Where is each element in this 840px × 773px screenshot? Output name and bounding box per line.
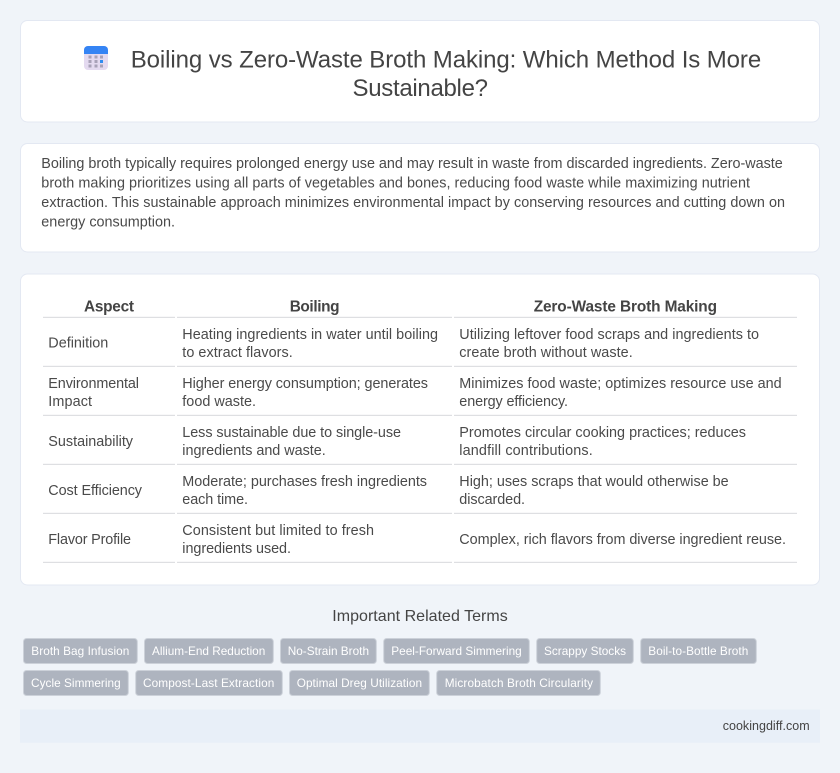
tag: No-Strain Broth: [288, 644, 369, 658]
tag: Boil-to-Bottle Broth: [648, 644, 748, 658]
tag: Optimal Dreg Utilization: [297, 676, 422, 690]
row: flavor profile: Complex, rich flavors from diverse ingredient reuse.: [459, 532, 786, 548]
tag: [24, 670, 128, 696]
footer bar: cookingdiff.com: [723, 719, 810, 733]
row: environmental impact: Impact: [48, 394, 92, 410]
row: flavor profile: [48, 523, 786, 557]
row: cost efficiency: Cost Efficiency: [48, 483, 143, 499]
panel: introduction text: energy consumption.: [41, 214, 175, 230]
panel: title header: [20, 20, 820, 122]
tag: [280, 638, 376, 664]
row: flavor profile: Flavor Profile: [48, 532, 131, 548]
row: sustainability: Less sustainable due to single-use: [182, 425, 401, 441]
row: environmental impact: energy efficiency.: [459, 394, 568, 410]
row: definition: Utilizing leftover food scraps and ingredients to: [459, 327, 759, 343]
tag: Peel-Forward Simmering: [391, 644, 522, 658]
tag: Broth Bag Infusion: [31, 644, 129, 658]
title: [131, 46, 761, 102]
tag: Scrappy Stocks: [544, 644, 626, 658]
tag: Cycle Simmering: [31, 676, 121, 690]
tag: [290, 670, 429, 696]
tag: Compost-Last Extraction: [143, 676, 274, 690]
table header row: Zero-Waste Broth Making: [534, 299, 717, 316]
table header row: [84, 299, 717, 316]
row: cost efficiency: [48, 474, 729, 508]
row: sustainability: ingredients and waste.: [182, 443, 326, 459]
table header row: Boiling: [290, 299, 340, 316]
panel: related term tags: [24, 638, 756, 696]
tag: [144, 638, 273, 664]
row: environmental impact: Minimizes food waste; optimizes resource use and: [459, 376, 782, 392]
row: environmental impact: [48, 376, 782, 410]
table header row: Aspect: [84, 299, 134, 316]
title: Boiling vs Zero-Waste Broth Making: Which Method Is More: [131, 46, 761, 74]
tag: [641, 638, 756, 664]
tag: [24, 638, 137, 664]
row: cost efficiency: discarded.: [459, 492, 525, 508]
row: sustainability: Promotes circular cooking practices; reduces: [459, 425, 746, 441]
title: Sustainable?: [352, 75, 488, 102]
row: flavor profile: ingredients used.: [182, 541, 291, 557]
row: definition: Definition: [48, 336, 108, 352]
row: cost efficiency: Moderate; purchases fresh ingredients: [182, 474, 427, 490]
panel: introduction text: Boiling broth typically requires prolonged energy use and may result in waste from discarded ingredients. Zero-waste: [41, 156, 783, 172]
heading: important related terms: Important Related Terms: [332, 608, 508, 625]
icon: calendar: [84, 46, 108, 70]
row: environmental impact: food waste.: [182, 394, 256, 410]
tag: Microbatch Broth Circularity: [445, 676, 593, 690]
row: cost efficiency: each time.: [182, 492, 248, 508]
row: environmental impact: Environmental: [48, 376, 139, 392]
footer bar: [20, 710, 820, 743]
row: definition: Heating ingredients in water until boiling: [182, 327, 438, 343]
tag: [437, 670, 600, 696]
row: sustainability: Sustainability: [48, 434, 134, 450]
tag: [384, 638, 529, 664]
row: environmental impact: Higher energy consumption; generates: [182, 376, 428, 392]
row: cost efficiency: High; uses scraps that would otherwise be: [459, 474, 729, 490]
tag: [136, 670, 282, 696]
row: definition: create broth without waste.: [459, 345, 633, 361]
row: definition: to extract flavors.: [182, 345, 293, 361]
row: definition: [48, 327, 759, 361]
row: flavor profile: Consistent but limited to fresh: [182, 523, 374, 539]
row: sustainability: landfill contributions.: [459, 443, 593, 459]
tag: [537, 638, 633, 664]
panel: comparison table: [20, 274, 820, 585]
tag: Allium-End Reduction: [152, 644, 265, 658]
row: sustainability: [48, 425, 746, 459]
panel: introduction text: extraction. This sustainable approach minimizes environmental impact by conserving resources and cutting down on: [41, 195, 785, 211]
panel: introduction text: [20, 144, 820, 252]
panel: introduction text: broth making prioritizes using all parts of vegetables and bones, reducing food waste while maximizing nutrient: [41, 176, 750, 192]
